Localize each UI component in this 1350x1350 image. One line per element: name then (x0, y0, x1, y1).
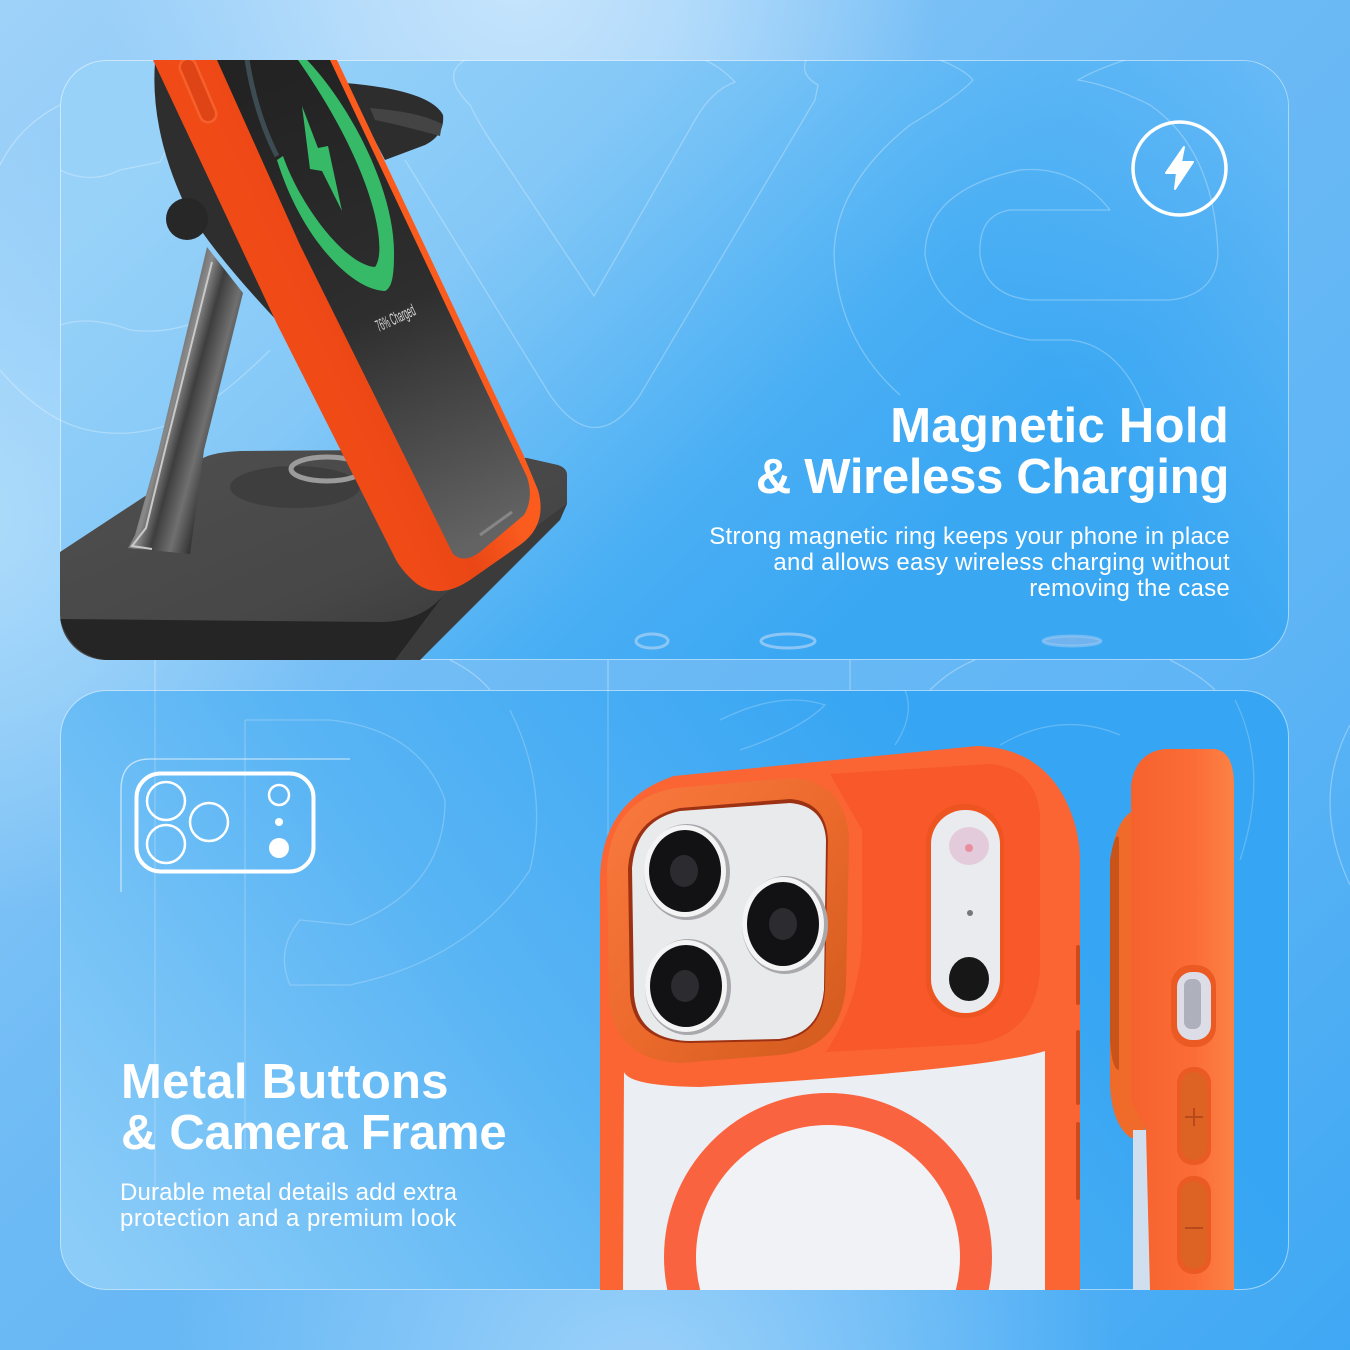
magsafe ring (680, 1109, 976, 1350)
stand base (60, 450, 567, 660)
side switch (1171, 965, 1216, 1047)
heading: metal buttons: & Camera Frame (121, 1106, 506, 1160)
phone screen (217, 60, 530, 559)
decorative outline letters (40, 60, 1218, 433)
phone case (153, 60, 541, 591)
panel: metal buttons (60, 690, 1288, 1350)
text: magnetic hold description: Strong magnetic ring keeps your phone in place (709, 523, 1230, 550)
heading: metal buttons (121, 1055, 506, 1160)
decorative outline letters (155, 690, 1254, 1200)
stand pole (128, 247, 243, 554)
heading: magnetic hold (756, 399, 1229, 504)
decorative outlines outside panels (0, 105, 1350, 885)
case back body (600, 746, 1080, 1290)
product photo: case back and side (600, 746, 1234, 1350)
side button (188, 67, 208, 114)
charging ring (277, 60, 394, 291)
text: magnetic hold description: removing the case (1029, 575, 1230, 602)
side translucent strip (1133, 1130, 1150, 1290)
camera lenses (644, 824, 828, 1035)
clear panel (623, 1051, 1045, 1290)
ripple ellipses (636, 634, 1101, 648)
product photo: phone on stand (60, 60, 567, 660)
stand discs (345, 83, 443, 160)
heading: magnetic hold: & Wireless Charging (756, 450, 1229, 504)
sensor pill (926, 804, 1004, 1018)
camera frame (607, 778, 849, 1063)
heading: magnetic hold: Magnetic Hold (890, 399, 1229, 453)
heading: metal buttons: Metal Buttons (121, 1055, 449, 1109)
text: magnetic hold description: and allows easy wireless charging without (773, 549, 1230, 576)
icon: camera module (121, 759, 350, 892)
text: metal buttons description: protection and a premium look (120, 1205, 457, 1232)
charge label: 76% Charged (372, 300, 418, 336)
icon: lightning bolt (1133, 122, 1226, 215)
text: magnetic hold description (709, 523, 1230, 602)
bolt (302, 106, 342, 211)
panel: magnetic charging (40, 60, 1288, 660)
text: metal buttons description: Durable metal details add extra (120, 1179, 457, 1206)
recessed section (826, 764, 1040, 1052)
side keys (1076, 945, 1080, 1200)
side buttons (1177, 1067, 1211, 1274)
side bump (1110, 810, 1145, 1140)
side case (1131, 749, 1234, 1290)
text: metal buttons description (120, 1179, 457, 1232)
